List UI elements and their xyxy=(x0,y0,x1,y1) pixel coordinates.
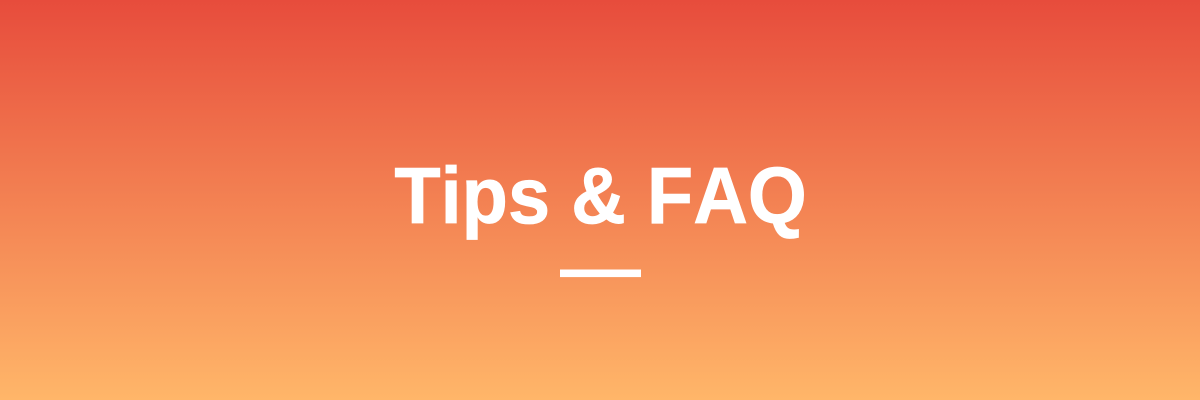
accent underline xyxy=(560,270,641,277)
title: Tips & FAQ xyxy=(394,152,807,240)
